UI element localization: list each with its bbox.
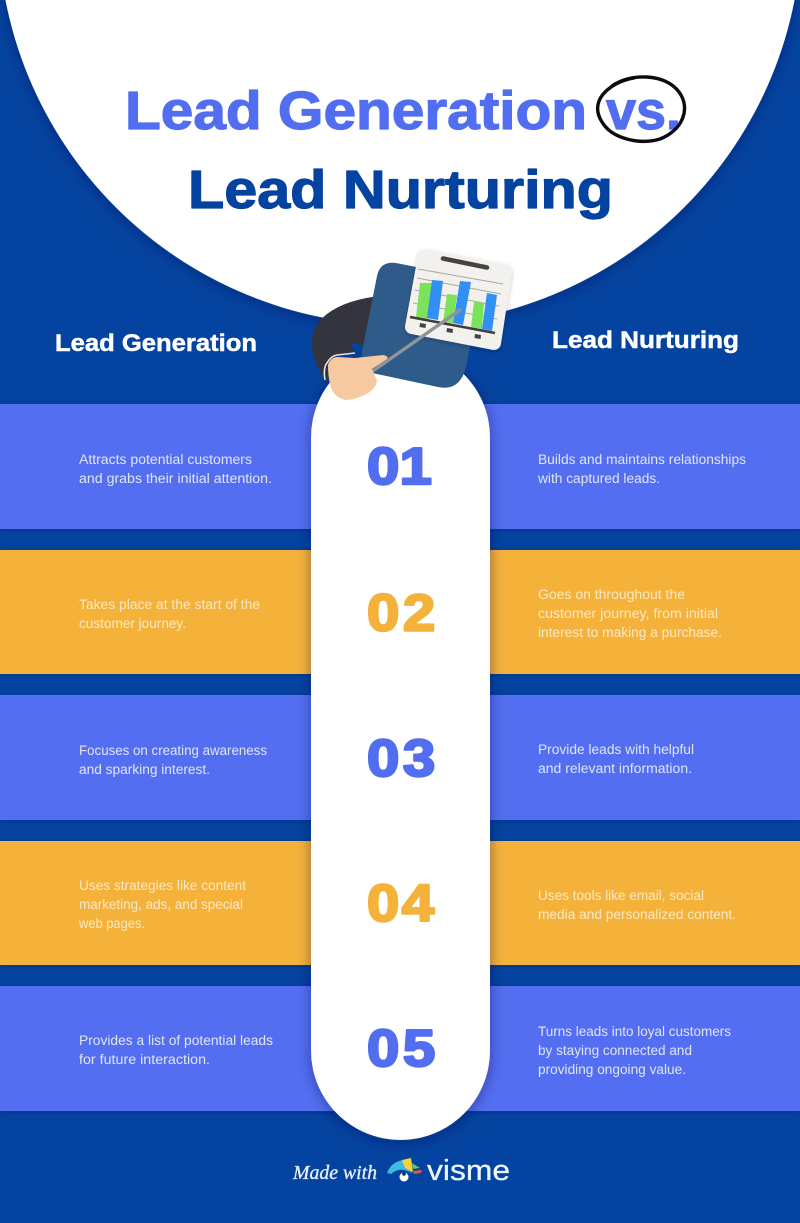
row 2 right text: Goes on throughout the	[538, 587, 685, 602]
row 4 right text	[538, 888, 736, 922]
arm sleeve	[312, 296, 380, 384]
pointer stick	[370, 310, 460, 373]
row 1 left text	[79, 452, 272, 486]
row 4 left text: Uses strategies like content	[79, 878, 246, 893]
column heading: Lead Generation: Lead Generation	[55, 330, 257, 357]
row 2 left text: customer journey.	[79, 616, 186, 631]
title line: Lead Generation: Lead Generation	[125, 81, 587, 141]
number 02: 02	[367, 583, 435, 642]
row 3 right text	[538, 742, 694, 776]
band 5	[0, 986, 800, 1111]
number 01: 01	[367, 437, 432, 495]
row 5 right text: Turns leads into loyal customers	[538, 1024, 731, 1039]
header white circle	[0, 0, 800, 325]
hand-drawn circle around vs.	[598, 77, 685, 141]
folder	[362, 263, 482, 388]
main title	[125, 77, 685, 220]
row 4 right text: media and personalized content.	[538, 907, 736, 922]
number 05: 05	[367, 1019, 435, 1077]
row 5 right text: by staying connected and	[538, 1043, 692, 1058]
made with text: Made with	[292, 1162, 377, 1184]
number 03: 03	[367, 729, 435, 787]
row 3 right text: Provide leads with helpful	[538, 742, 694, 757]
row 3 left text: and sparking interest.	[79, 762, 210, 777]
band 1	[0, 404, 800, 529]
chart card	[410, 256, 505, 343]
row 1 right text: Builds and maintains relationships	[538, 452, 746, 467]
row 1 right text	[537, 452, 746, 486]
chart header bar	[443, 258, 487, 268]
row 5 right text: providing ongoing value.	[538, 1062, 686, 1077]
row 4 right text: Uses tools like email, social	[538, 888, 704, 903]
title word: vs.: vs.	[606, 81, 681, 141]
row 4 left text: web pages.	[78, 916, 145, 931]
row 3 left text	[79, 743, 267, 777]
row 5 left text: Provides a list of potential leads	[79, 1033, 273, 1048]
row bands	[0, 404, 800, 1111]
row 2 left text	[79, 597, 260, 631]
band 4	[0, 841, 800, 965]
chart grid lines	[413, 269, 503, 319]
band 2	[0, 550, 800, 674]
row 4 left text: marketing, ads, and special	[79, 897, 243, 912]
row 3 left text: Focuses on creating awareness	[79, 743, 267, 758]
illustration: hand presenting a bar chart	[312, 256, 505, 400]
band 3	[0, 695, 800, 820]
row 1 right text: with captured leads.	[537, 471, 660, 486]
number 04: 04	[367, 874, 434, 932]
shirt cuff	[324, 353, 355, 380]
visme logo icon	[387, 1158, 422, 1182]
hand	[328, 355, 388, 400]
row 5 left text: for future interaction.	[79, 1052, 210, 1067]
row 5 left text	[79, 1033, 273, 1067]
center white pill	[311, 348, 490, 1140]
title line: Lead Nurturing: Lead Nurturing	[188, 160, 613, 220]
row 4 left text	[78, 878, 246, 931]
row 2 right text	[538, 587, 722, 640]
row 3 right text: and relevant information.	[538, 761, 692, 776]
row 1 left text: Attracts potential customers	[79, 452, 252, 467]
row 2 right text: interest to making a purchase.	[538, 625, 722, 640]
row 2 right text: customer journey, from initial	[538, 606, 718, 621]
row 1 left text: and grabs their initial attention.	[79, 471, 272, 486]
chart bars	[416, 280, 497, 331]
footer: made with visme	[292, 1155, 510, 1187]
row 2 left text: Takes place at the start of the	[79, 597, 260, 612]
chart baseline and ticks	[410, 317, 495, 333]
row 5 right text	[538, 1024, 731, 1077]
column heading: Lead Nurturing: Lead Nurturing	[552, 327, 739, 354]
visme wordmark: visme	[427, 1155, 510, 1187]
numbers	[367, 437, 435, 1077]
